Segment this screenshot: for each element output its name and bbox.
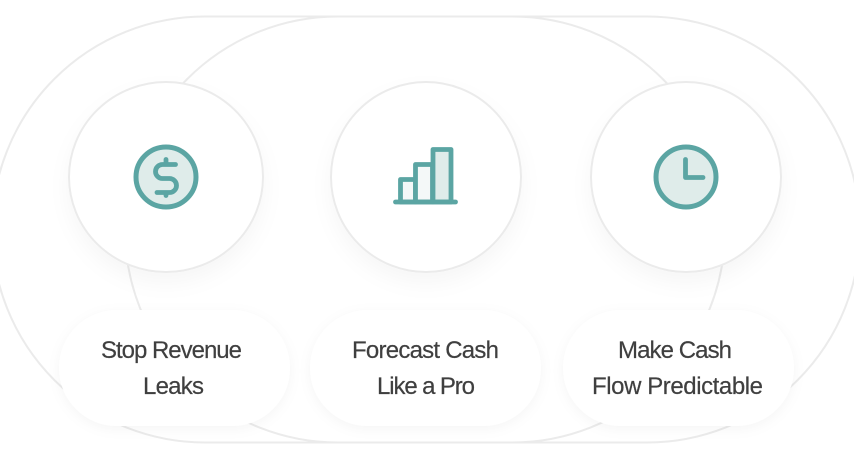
icon: bar chart: [396, 150, 456, 202]
label text: forecast cash: Forecast Cash: [352, 337, 499, 364]
label pill: make cash flow predictable: [563, 310, 794, 426]
label text: forecast cash: [352, 337, 499, 400]
panel: forecast cash circle: [331, 82, 521, 272]
label text: make cash flow predictable: Flow Predictable: [592, 373, 763, 400]
label text: stop revenue leaks: [101, 337, 242, 400]
label text: stop revenue leaks: Leaks: [143, 373, 204, 400]
icon: dollar coin: [136, 147, 196, 207]
label text: stop revenue leaks: Stop Revenue: [101, 337, 242, 364]
inner connector loop: [125, 16, 725, 442]
icon: clock: [656, 147, 716, 207]
label text: make cash flow predictable: [592, 337, 763, 400]
label pill: forecast cash: [310, 310, 541, 426]
label pill: stop revenue leaks: [59, 310, 290, 426]
panel: stop revenue leaks circle: [69, 82, 263, 272]
label text: make cash flow predictable: Make Cash: [618, 337, 732, 364]
label text: forecast cash: Like a Pro: [377, 373, 475, 400]
panel: make cash flow predictable circle: [591, 82, 781, 272]
